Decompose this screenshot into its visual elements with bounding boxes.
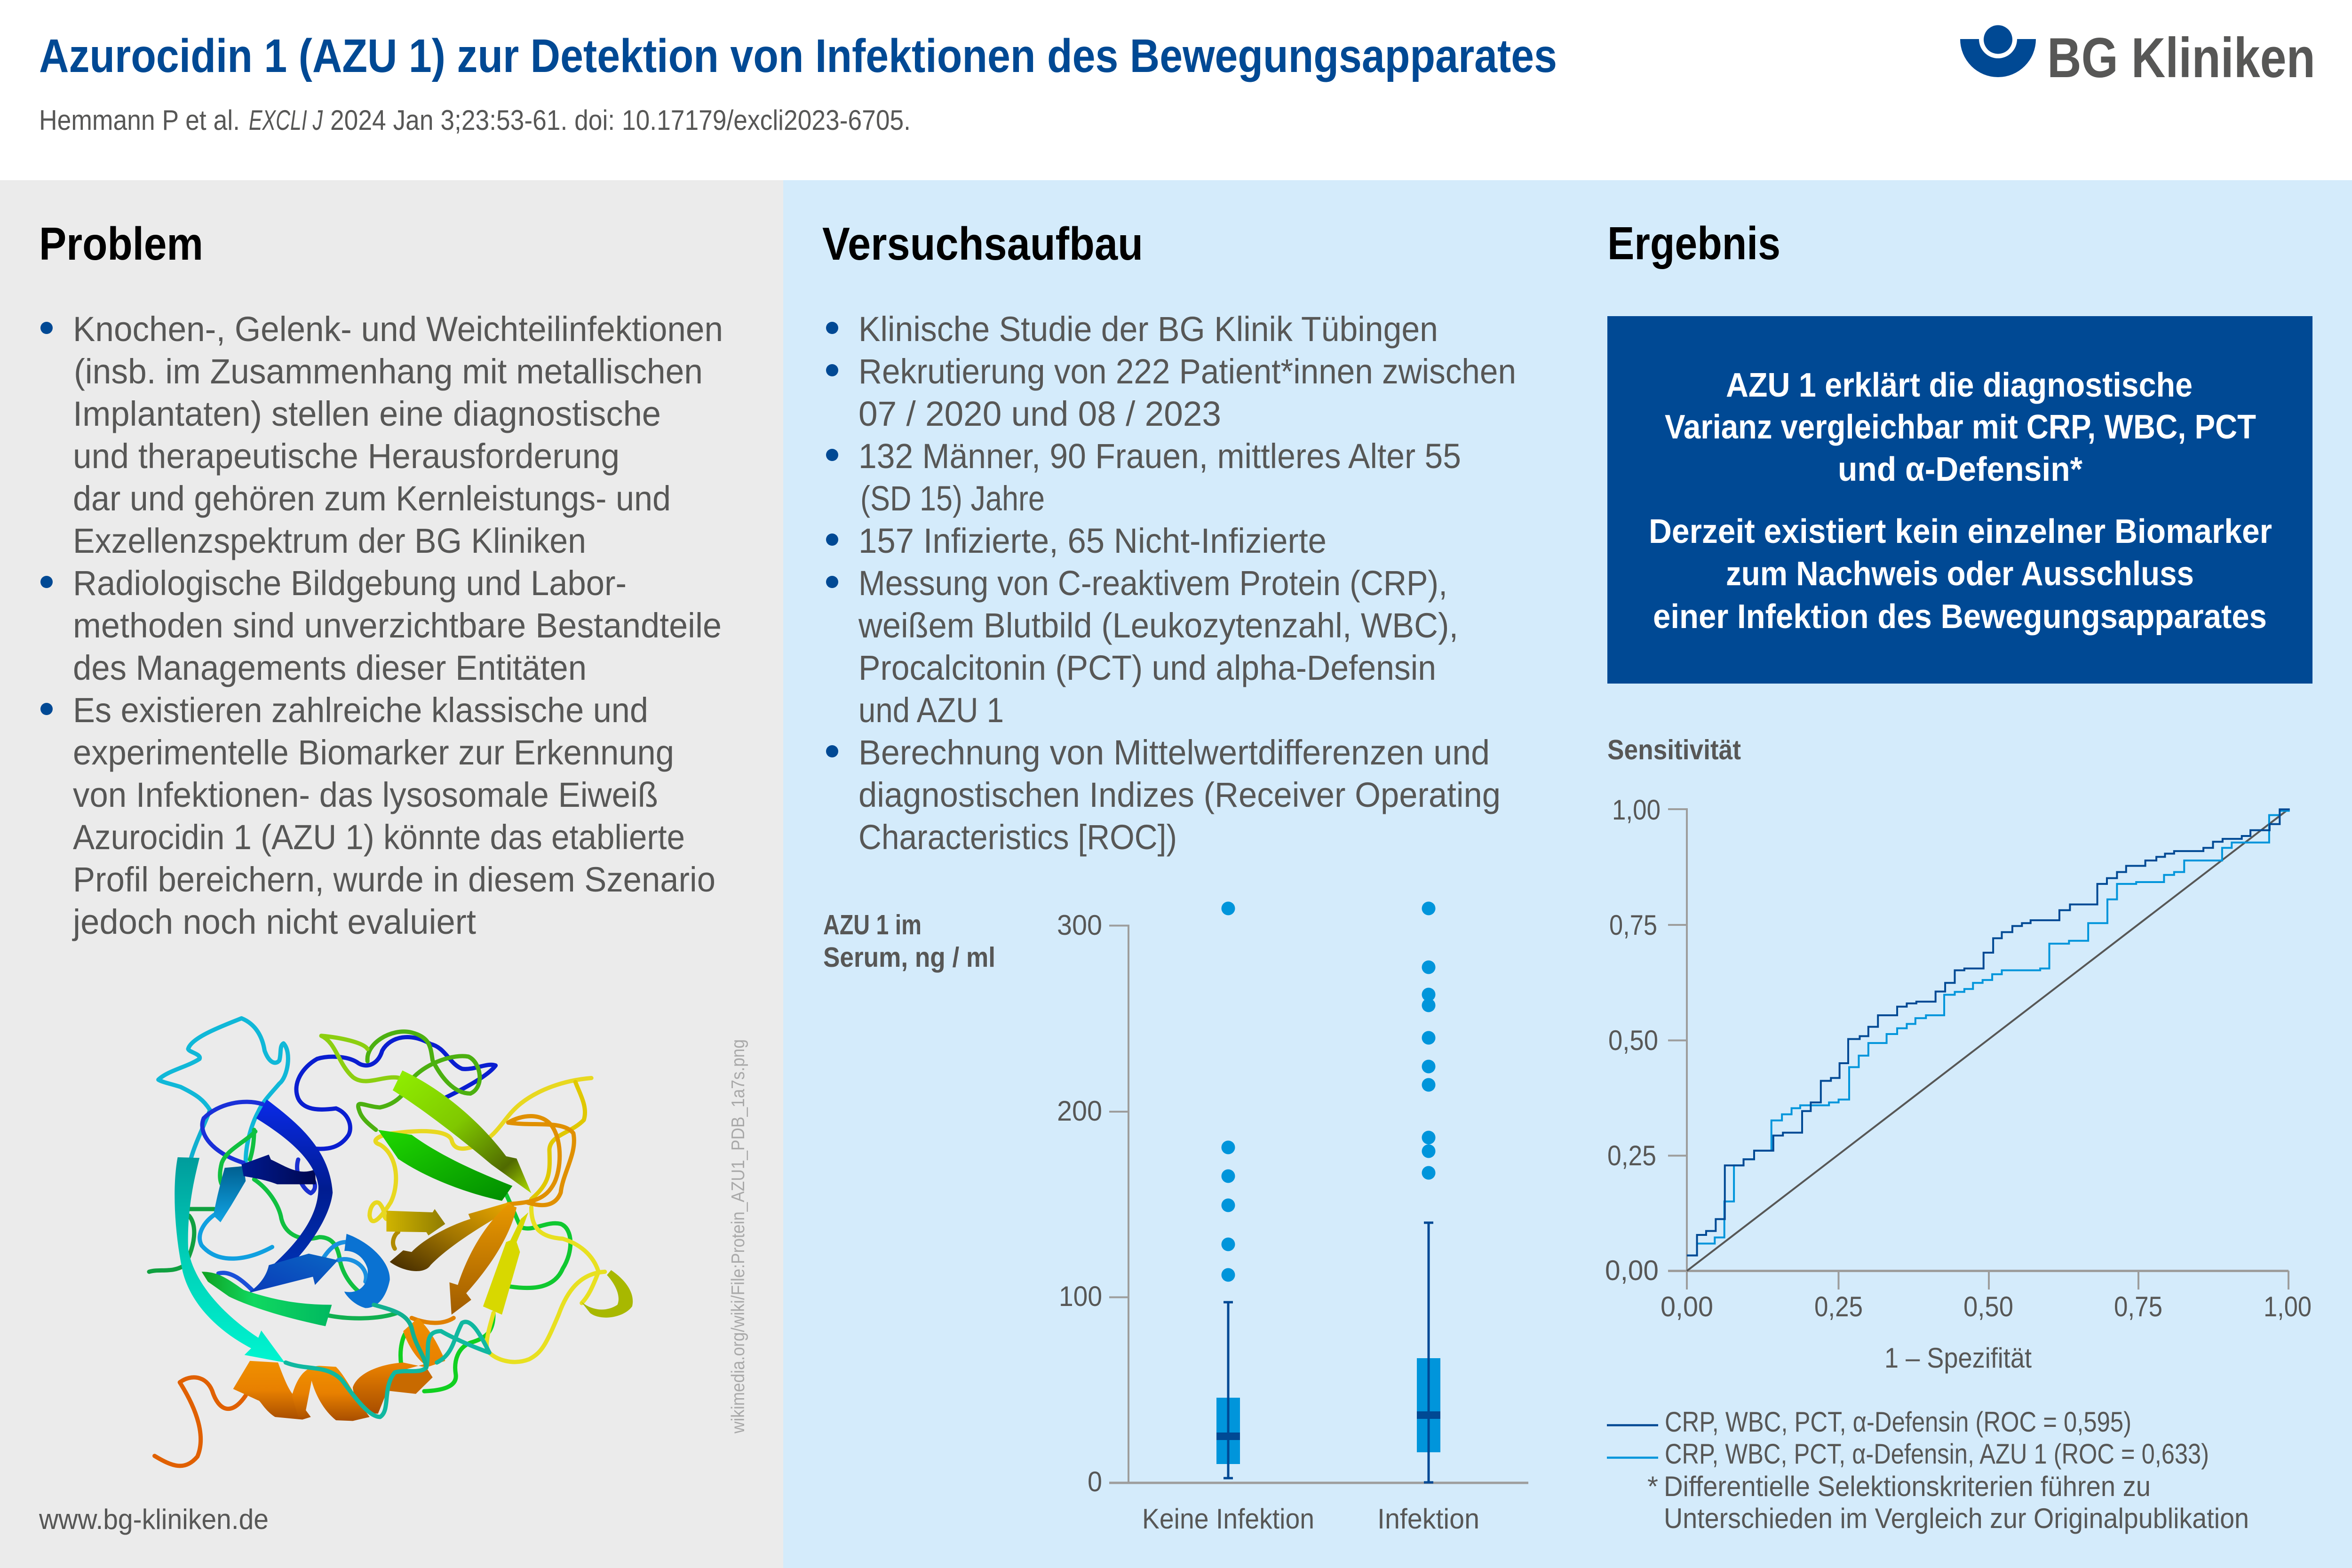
illustration: protein ribbon structure [149, 1019, 633, 1466]
callout: key findings [1607, 316, 2312, 684]
panel: problem [39, 218, 748, 1535]
problem bullet list: Knochen-, Gelenk- und Weichteilinfektionen [73, 310, 723, 349]
callout: key findings: AZU 1 erklärt die diagnostische [1726, 366, 2193, 404]
y axis labels: 0,75 [1609, 909, 1657, 941]
setup bullet list: 132 Männer, 90 Frauen, mittleres Alter 55 [858, 437, 1461, 476]
callout: key findings: Derzeit existiert kein einzelner Biomarker [1649, 513, 2272, 550]
axes [1668, 809, 2288, 1289]
title: Azurocidin 1 (AZU 1) zur Detektion von Infektionen des Bewegungsapparates [39, 30, 1557, 82]
y axis labels [1605, 794, 1661, 1286]
problem bullet list: und therapeutische Herausforderung [73, 437, 620, 476]
setup bullet list: Procalcitonin (PCT) und alpha-Defensin [858, 648, 1436, 687]
problem bullet list: Profil bereichern, wurde in diesem Szenario [73, 860, 715, 899]
problem bullet list: dar und gehören zum Kernleistungs- und [73, 479, 671, 518]
x axis labels: 0,25 [1814, 1291, 1863, 1322]
problem bullet list: jedoch noch nicht evaluiert [72, 902, 476, 941]
curve with AZU 1 [1687, 811, 2290, 1256]
y axis title: Sensitivität [1607, 734, 1741, 765]
x axis labels [1661, 1291, 2312, 1322]
box: Infektion [1417, 901, 1440, 1482]
problem bullet list: Exzellenzspektrum der BG Kliniken [73, 521, 586, 560]
problem bullet list: Radiologische Bildgebung und Labor- [73, 564, 627, 603]
x axis title: 1 – Spezifität [1884, 1342, 2032, 1374]
callout: key findings: und α-Defensin* [1838, 451, 2082, 488]
heading: Ergebnis: Ergebnis [1607, 217, 1780, 269]
problem bullet list: (insb. im Zusammenhang mit metallischen [74, 352, 703, 391]
panel background: experiment and results [783, 180, 2352, 1568]
problem bullet list: von Infektionen- das lysosomale Eiweiß [73, 775, 658, 814]
website: www.bg-kliniken.de [39, 1504, 269, 1535]
image credit: wikimedia.org/wiki/File:Protein_AZU1_PDB_1a7s.png [728, 1039, 748, 1434]
setup bullet list: und AZU 1 [858, 691, 1004, 730]
category labels: Keine Infektion [1142, 1503, 1314, 1535]
legend: CRP, WBC, PCT, α-Defensin (ROC = 0,595) [1665, 1406, 2131, 1438]
callout: key findings: Varianz vergleichbar mit CRP, WBC, PCT [1665, 408, 2256, 446]
problem bullet list: Azurocidin 1 (AZU 1) könnte das etablierte [73, 818, 685, 857]
x axis labels: 0,00 [1661, 1291, 1713, 1322]
citation: EXCLI J [249, 104, 323, 136]
x axis labels: 0,50 [1963, 1291, 2013, 1322]
citation [39, 104, 911, 136]
panel: result [1605, 217, 2312, 1534]
logo: BG Kliniken [1960, 25, 2315, 89]
x axis labels: 0,75 [2114, 1291, 2162, 1322]
panel background: problem [0, 180, 783, 1568]
legend: CRP, WBC, PCT, α-Defensin, AZU 1 (ROC = 0,633) [1665, 1438, 2209, 1470]
citation: Hemmann P et al. [39, 104, 240, 136]
panel: experiment setup [822, 218, 1528, 1535]
footnote: Unterschieden im Vergleich zur Originalpublikation [1664, 1503, 2249, 1534]
curve without AZU 1 [1687, 809, 2290, 1256]
setup bullet list: Characteristics [ROC]) [858, 818, 1177, 857]
y axis title [823, 909, 995, 973]
line chart: ROC curves [1605, 734, 2312, 1534]
setup bullet list: 157 Infizierte, 65 Nicht-Infizierte [858, 521, 1327, 560]
y axis labels: 1,00 [1612, 794, 1661, 826]
footnote: * [1647, 1471, 1658, 1502]
callout: key findings: einer Infektion des Bewegungsapparates [1653, 598, 2267, 636]
setup bullet list: 07 / 2020 und 08 / 2023 [858, 394, 1221, 433]
setup bullet list: diagnostischen Indizes (Receiver Operating [858, 775, 1501, 814]
y axis labels: 100 [1059, 1281, 1102, 1312]
problem bullet list: experimentelle Biomarker zur Erkennung [73, 733, 674, 772]
problem bullet list: methoden sind unverzichtbare Bestandteile [73, 606, 722, 645]
setup bullet list: weißem Blutbild (Leukozytenzahl, WBC), [858, 606, 1458, 645]
setup bullet list [826, 310, 1516, 857]
heading: Problem: Problem [39, 218, 203, 270]
y axis title: AZU 1 im [823, 909, 922, 940]
box plot: AZU 1 serum level [823, 901, 1528, 1535]
setup bullet list: Klinische Studie der BG Klinik Tübingen [858, 310, 1438, 349]
y axis labels: 200 [1057, 1095, 1102, 1127]
legend [1607, 1406, 2209, 1470]
setup bullet list: Rekrutierung von 222 Patient*innen zwischen [858, 352, 1516, 391]
footnote: Differentielle Selektionskriterien führen zu [1664, 1471, 2151, 1502]
x axis labels: 1,00 [2264, 1291, 2312, 1322]
footnote [1647, 1471, 2249, 1534]
y axis labels: 0,50 [1608, 1025, 1658, 1056]
problem bullet list: Es existieren zahlreiche klassische und [73, 691, 648, 730]
citation: 2024 Jan 3;23:53-61. doi: 10.17179/excli2023-6705. [330, 104, 911, 136]
problem bullet list [40, 310, 723, 941]
setup bullet list: (SD 15) Jahre [860, 479, 1045, 518]
y axis labels [1057, 909, 1102, 1497]
y axis labels: 0,00 [1605, 1255, 1659, 1286]
problem bullet list: Implantaten) stellen eine diagnostische [73, 394, 661, 433]
heading: Versuchsaufbau: Versuchsaufbau [822, 218, 1143, 270]
problem bullet list: des Managements dieser Entitäten [73, 648, 587, 687]
y axis title: Serum, ng / ml [823, 942, 995, 973]
y axis labels: 300 [1057, 909, 1102, 941]
box: Keine Infektion [1216, 901, 1240, 1478]
category labels [1142, 1503, 1479, 1535]
setup bullet list: Berechnung von Mittelwertdifferenzen und [858, 733, 1490, 772]
setup bullet list: Messung von C-reaktivem Protein (CRP), [858, 564, 1447, 603]
axes [1109, 926, 1128, 1483]
diagonal reference line [1687, 809, 2288, 1271]
panel background: header [0, 0, 2352, 180]
y axis labels: 0,25 [1607, 1140, 1656, 1171]
callout: key findings: zum Nachweis oder Ausschluss [1726, 555, 2194, 593]
category labels: Infektion [1377, 1503, 1479, 1535]
y axis labels: 0 [1088, 1466, 1102, 1497]
